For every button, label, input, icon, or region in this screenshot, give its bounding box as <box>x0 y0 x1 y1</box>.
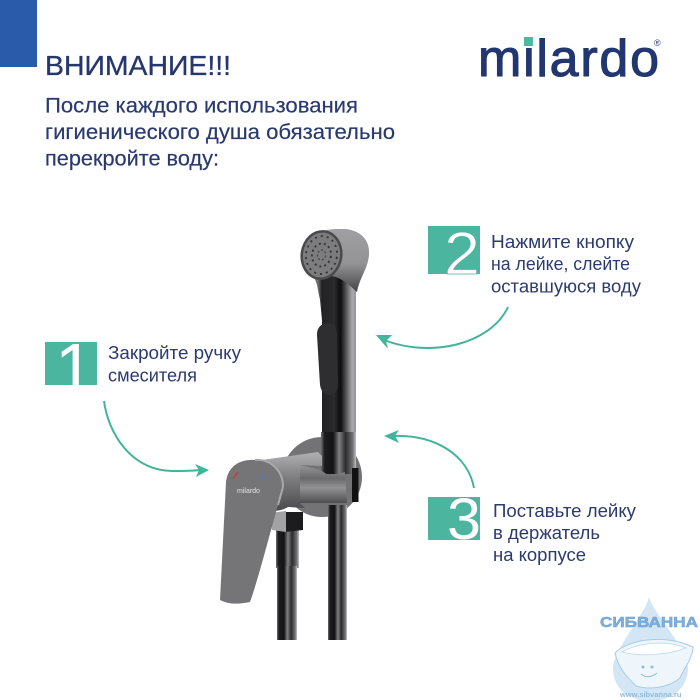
logo: milardo: milardo <box>478 30 659 88</box>
wall plate <box>282 437 362 517</box>
shower face <box>297 227 346 283</box>
step 1 text: смесителя <box>108 364 197 386</box>
step 2 badge: 2 <box>444 220 480 287</box>
step 3 text: в держатель <box>493 522 600 543</box>
step 3 badge <box>428 487 481 552</box>
step 2 text: на лейке, слейте <box>491 253 630 274</box>
step 1 badge <box>45 342 97 385</box>
corner accent <box>0 0 37 67</box>
step 2 badge <box>428 220 480 287</box>
watermark: sibvanna: СИБВАННА <box>600 615 699 631</box>
button <box>317 323 338 395</box>
arrow: step 3 to holder <box>384 430 474 488</box>
shower head cap <box>318 229 369 292</box>
step 3 text: на корпусе <box>493 544 586 565</box>
upper tube and holder <box>300 432 356 503</box>
step 3 text: Поставьте лейку <box>493 500 637 521</box>
step 2 text: Нажмите кнопку <box>491 231 635 252</box>
warning text <box>45 94 395 170</box>
hose left <box>276 530 299 640</box>
arrow: step 2 to button <box>376 307 508 349</box>
lever handle: milardo <box>237 488 260 495</box>
hand shower body <box>312 229 369 453</box>
warning text: После каждого использования <box>45 94 358 118</box>
step 2 text: оставшуюся воду <box>491 276 642 296</box>
warning text: перекройте воду: <box>45 146 219 170</box>
watermark: sibvanna <box>600 597 699 700</box>
step 3 text <box>493 500 637 565</box>
watermark: sibvanna: www.sibvanna.ru <box>619 690 682 699</box>
step 2 text <box>491 231 642 296</box>
step 1 text: Закройте ручку <box>108 342 242 363</box>
arrow: step 1 to lever <box>104 401 209 477</box>
lever handle <box>220 460 283 604</box>
warning text: гигиенического душа обязательно <box>45 120 395 144</box>
heading: ВНИМАНИЕ!!! <box>45 50 231 81</box>
nut <box>270 511 303 532</box>
step 1 badge: 1 <box>55 329 94 407</box>
product: shower and mixer <box>220 227 369 640</box>
mixer cylinder <box>262 452 322 512</box>
logo: milardo: ® <box>654 38 661 48</box>
black clip <box>352 468 358 502</box>
step 1 text <box>108 342 242 386</box>
hose right <box>328 505 347 640</box>
step 3 badge: 3 <box>447 487 481 552</box>
